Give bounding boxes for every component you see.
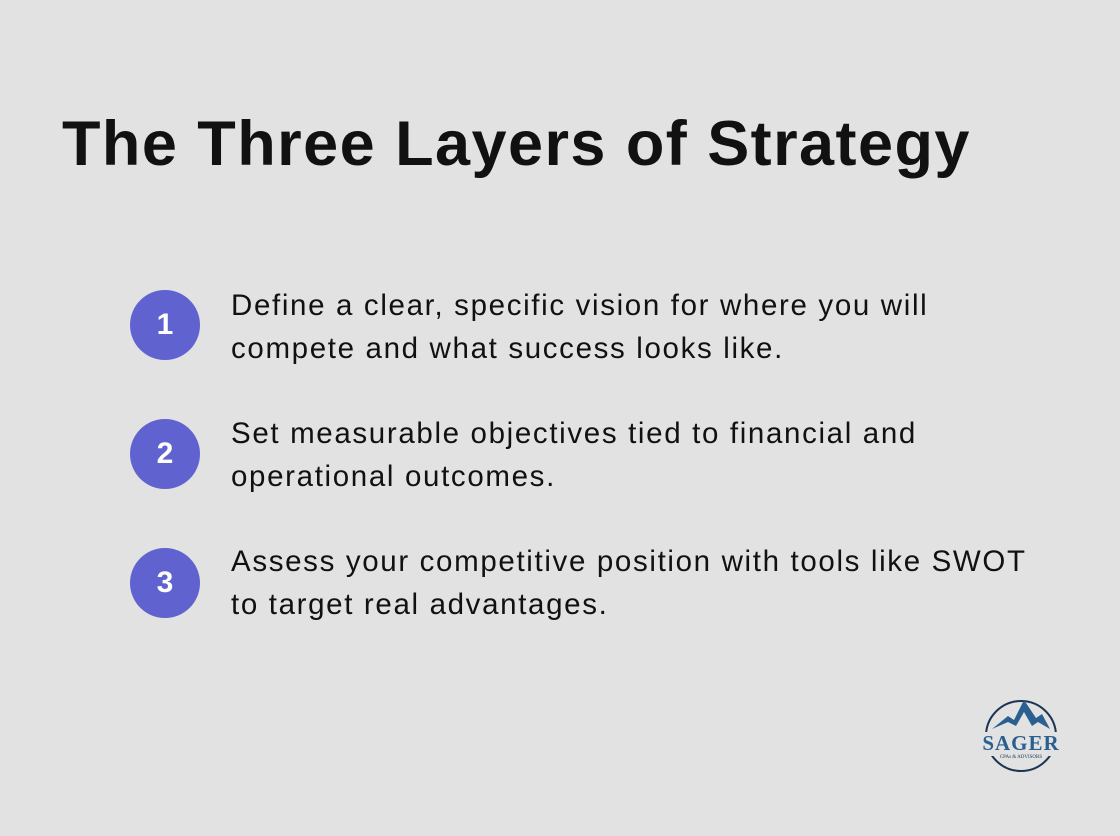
number badge 1 <box>130 290 200 360</box>
number badge 1: 1 <box>157 308 173 341</box>
text 3: to target real advantages. <box>231 588 608 621</box>
logo: Sager: SAGER <box>982 731 1060 755</box>
text 1: compete and what success looks like. <box>231 332 784 365</box>
text 2: operational outcomes. <box>231 460 556 493</box>
number badge 3 <box>130 548 200 618</box>
text 2: Set measurable objectives tied to financial and <box>231 417 917 450</box>
item 3 <box>130 545 1027 621</box>
text 2 <box>231 417 917 493</box>
text 1: Define a clear, specific vision for where you will <box>231 289 928 322</box>
title: The Three Layers of Strategy <box>62 109 971 179</box>
logo: Sager: CPAs & ADVISORS <box>1000 755 1042 760</box>
text 3 <box>231 545 1027 621</box>
item 1 <box>130 289 928 365</box>
text 1 <box>231 289 928 365</box>
number badge 2 <box>130 419 200 489</box>
item 2 <box>130 417 917 493</box>
text 3: Assess your competitive position with tools like SWOT <box>231 545 1027 578</box>
number badge 3: 3 <box>157 566 173 599</box>
number badge 2: 2 <box>157 437 173 470</box>
logo: Sager <box>982 700 1060 772</box>
